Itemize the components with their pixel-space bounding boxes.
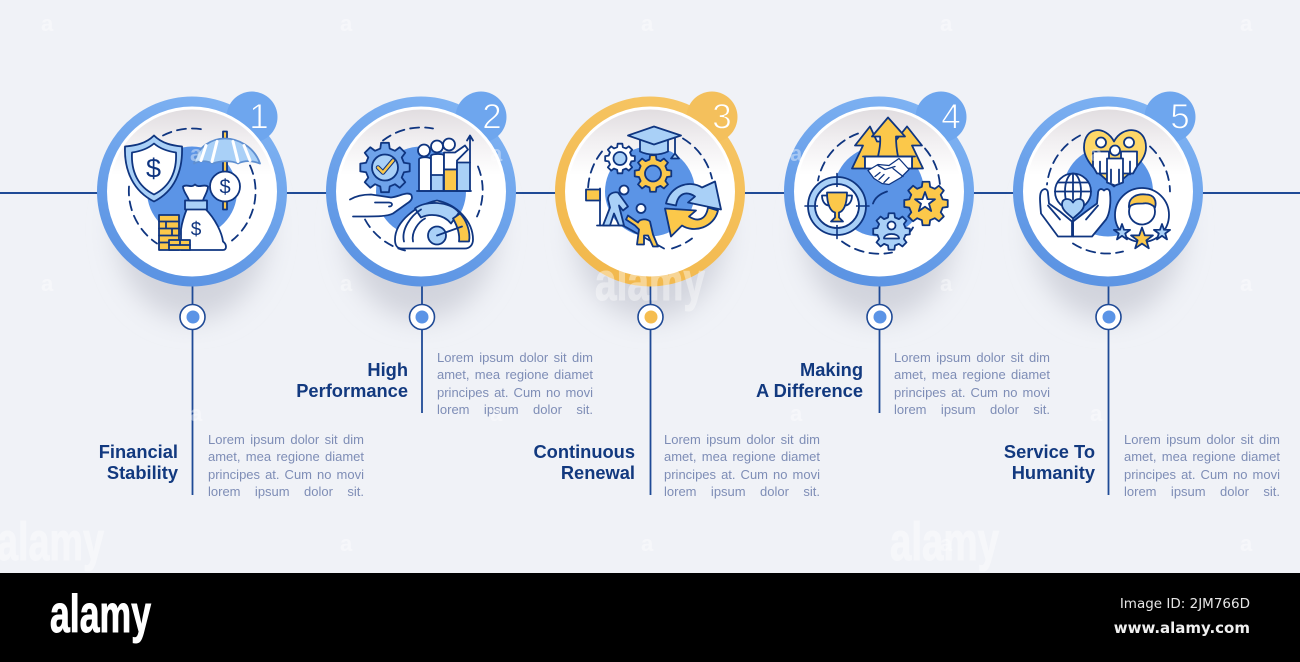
heading: Service To bbox=[1004, 441, 1095, 462]
body text: principes at. Cum no movi bbox=[894, 384, 1050, 400]
watermarks: a bbox=[490, 401, 503, 426]
watermarks: a bbox=[490, 141, 503, 166]
website: www.alamy.com bbox=[1114, 619, 1250, 637]
watermarks: a bbox=[190, 141, 203, 166]
body text bbox=[1124, 432, 1280, 499]
body text: Lorem ipsum dolor sit dim bbox=[664, 432, 820, 447]
circle with finance icon: $ bbox=[146, 154, 161, 184]
watermarks: a bbox=[940, 271, 953, 296]
circle with finance icon: $ bbox=[191, 220, 202, 240]
panel: high performance bbox=[296, 92, 593, 417]
heading: Performance bbox=[296, 380, 408, 401]
panel: service to humanity bbox=[1004, 92, 1280, 499]
watermarks: alamy bbox=[890, 512, 999, 572]
watermarks: a bbox=[790, 141, 803, 166]
watermarks: a bbox=[190, 401, 203, 426]
body text: principes at. Cum no movi bbox=[437, 384, 593, 400]
watermarks: a bbox=[641, 11, 654, 36]
body text: amet, mea regione diamet bbox=[208, 449, 364, 464]
watermarks: a bbox=[1240, 271, 1253, 296]
body text: principes at. Cum no movi bbox=[208, 466, 364, 482]
body text: principes at. Cum no movi bbox=[1124, 466, 1280, 482]
body text bbox=[664, 432, 820, 499]
circle with finance icon bbox=[97, 92, 287, 495]
watermarks: a bbox=[940, 531, 953, 556]
watermarks: alamy bbox=[595, 252, 705, 312]
body text: principes at. Cum no movi bbox=[664, 466, 820, 482]
body text: amet, mea regione diamet bbox=[664, 449, 820, 464]
watermarks: a bbox=[641, 531, 654, 556]
body text: lorem ipsum dolor sit. bbox=[208, 484, 364, 499]
heading: A Difference bbox=[756, 380, 863, 401]
heading: Stability bbox=[107, 462, 178, 483]
watermarks: a bbox=[940, 11, 953, 36]
panel: financial stability bbox=[97, 92, 364, 499]
body text: Lorem ipsum dolor sit dim bbox=[437, 350, 593, 365]
heading: Financial bbox=[99, 441, 178, 462]
circle with performance icon bbox=[326, 92, 516, 413]
watermarks: a bbox=[1090, 141, 1103, 166]
body text: lorem ipsum dolor sit. bbox=[1124, 484, 1280, 499]
alamy logo: alamy bbox=[50, 585, 151, 644]
heading bbox=[533, 441, 635, 483]
circle with finance icon: 1 bbox=[249, 98, 269, 136]
heading bbox=[296, 359, 408, 401]
body text: Lorem ipsum dolor sit dim bbox=[894, 350, 1050, 365]
watermarks: a bbox=[41, 11, 54, 36]
circle with finance icon: $ bbox=[219, 176, 231, 198]
body text: lorem ipsum dolor sit. bbox=[664, 484, 820, 499]
body text: lorem ipsum dolor sit. bbox=[437, 402, 593, 417]
circle with humanity icon bbox=[1013, 92, 1203, 495]
heading: High bbox=[367, 359, 408, 380]
body text: amet, mea regione diamet bbox=[1124, 449, 1280, 464]
body text: lorem ipsum dolor sit. bbox=[894, 402, 1050, 417]
circle with renewal icon bbox=[555, 92, 745, 495]
horizontal timeline line bbox=[0, 192, 1300, 194]
watermarks: a bbox=[340, 271, 353, 296]
panel: making a difference bbox=[756, 92, 1050, 417]
heading: Renewal bbox=[561, 462, 635, 483]
body text bbox=[437, 350, 593, 417]
heading: Continuous bbox=[533, 441, 635, 462]
circle with humanity icon: 5 bbox=[1170, 98, 1189, 136]
heading bbox=[1004, 441, 1095, 483]
heading bbox=[756, 359, 863, 401]
circle with difference icon bbox=[784, 92, 974, 413]
circle with renewal icon: 3 bbox=[712, 98, 731, 136]
footer bar bbox=[0, 573, 1300, 662]
body text bbox=[894, 350, 1050, 417]
circle with performance icon: 2 bbox=[482, 98, 501, 136]
heading: Humanity bbox=[1012, 462, 1095, 483]
watermarks: a bbox=[41, 271, 54, 296]
heading: Making bbox=[800, 359, 863, 380]
watermarks: a bbox=[1240, 531, 1253, 556]
watermarks: a bbox=[1090, 401, 1103, 426]
body text: Lorem ipsum dolor sit dim bbox=[1124, 432, 1280, 447]
watermarks: alamy bbox=[0, 512, 104, 572]
watermarks: a bbox=[340, 531, 353, 556]
panel: continuous renewal bbox=[533, 92, 820, 499]
watermarks: a bbox=[790, 401, 803, 426]
heading bbox=[99, 441, 178, 483]
body text bbox=[208, 432, 364, 499]
body text: amet, mea regione diamet bbox=[894, 367, 1050, 382]
watermarks: a bbox=[340, 11, 353, 36]
watermarks: a bbox=[1240, 11, 1253, 36]
body text: amet, mea regione diamet bbox=[437, 367, 593, 382]
body text: Lorem ipsum dolor sit dim bbox=[208, 432, 364, 447]
image id: Image ID: 2JM766D bbox=[1120, 596, 1250, 612]
circle with difference icon: 4 bbox=[941, 98, 961, 136]
